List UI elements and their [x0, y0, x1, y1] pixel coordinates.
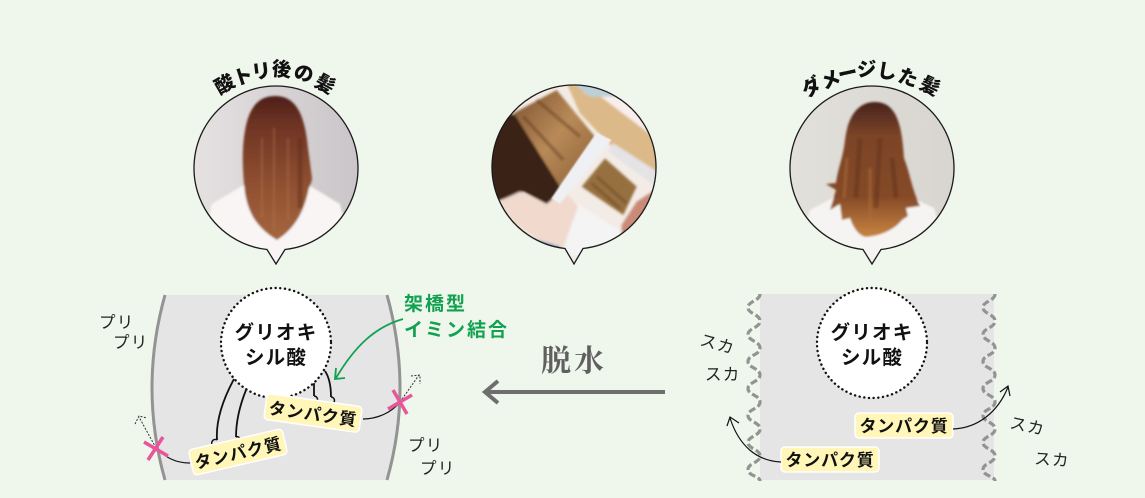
label: imine crosslink — [404, 293, 509, 341]
arrow: protein escaping right — [953, 386, 1010, 429]
heading: hair after acid treatment — [211, 57, 339, 99]
heading: hair after acid treatment: 髪 — [311, 70, 339, 99]
glyoxylic acid circle: グリオキ — [831, 321, 913, 344]
photo bubble: hair after acid treatment — [192, 84, 360, 268]
sound words: puri puri: プリ — [408, 436, 443, 455]
glyoxylic acid circle: グリオキ — [235, 321, 317, 344]
sound words: puri puri: プリ — [113, 333, 148, 352]
heading: damaged hair: ー — [836, 61, 860, 87]
heading: hair after acid treatment: 後 — [271, 57, 293, 82]
label: imine crosslink: イミン結合 — [404, 319, 509, 341]
sound words: suka suka — [698, 331, 1070, 470]
pink cross marks — [144, 437, 168, 460]
bond threads — [212, 371, 335, 447]
heading: hair after acid treatment: の — [291, 61, 316, 87]
sound words: puri puri: プリ — [420, 459, 455, 478]
left wavy edge — [748, 294, 760, 481]
protein tag upper: タンパク質 — [267, 399, 358, 430]
diagram: healthy bonded hair section — [135, 288, 420, 480]
protein tag upper: タンパク質 — [860, 417, 948, 436]
protein tag lower: タンパク質 — [193, 434, 284, 473]
heading: damaged hair: メ — [818, 67, 844, 94]
glyoxylic acid circle: シル酸 — [841, 347, 903, 369]
glyoxylic acid circle — [817, 288, 927, 398]
sound words: puri puri: プリ — [99, 313, 134, 332]
hair shaft — [760, 294, 994, 480]
photo bubble: applying a hair iron — [491, 84, 657, 266]
sound words: suka suka: スカ — [1034, 450, 1070, 470]
glyoxylic acid circle — [221, 288, 331, 398]
diagram: damaged hair section — [727, 288, 1010, 481]
heading: damaged hair: し — [876, 60, 898, 84]
heading: damaged hair — [798, 59, 943, 102]
hair shaft with curved edges — [152, 295, 400, 480]
sound words: suka suka: スカ — [698, 331, 737, 358]
right shaft edge — [387, 295, 400, 480]
heading: dehydration: 脱水 — [541, 345, 607, 378]
photo bubble: damaged hair — [788, 84, 956, 268]
dotted escape arrows — [135, 416, 156, 448]
sound words: suka suka: スカ — [705, 366, 740, 384]
protein tag lower — [781, 447, 879, 472]
arrow: protein escaping left — [727, 417, 781, 462]
heading: hair after acid treatment: 酸 — [211, 69, 239, 99]
heading: damaged hair: ジ — [857, 59, 877, 81]
left shaft edge — [152, 295, 165, 480]
heading: damaged hair: ダ — [798, 72, 826, 102]
heading: hair after acid treatment: リ — [250, 60, 272, 84]
protein tag lower: タンパク質 — [786, 451, 874, 470]
heading: damaged hair: 髪 — [916, 72, 943, 101]
glyoxylic acid circle: シル酸 — [245, 347, 307, 369]
heading: hair after acid treatment: ト — [230, 64, 256, 91]
protein tag upper — [855, 413, 953, 438]
sound words: puri puri — [99, 313, 455, 478]
heading: damaged hair: た — [895, 65, 921, 92]
release threads — [156, 448, 190, 463]
right wavy edge — [983, 294, 995, 481]
sound words: suka suka: スカ — [1008, 414, 1047, 439]
arrow: points to crosslink — [335, 319, 403, 379]
arrow: process direction — [485, 381, 665, 403]
label: imine crosslink: 架橋型 — [404, 293, 467, 315]
